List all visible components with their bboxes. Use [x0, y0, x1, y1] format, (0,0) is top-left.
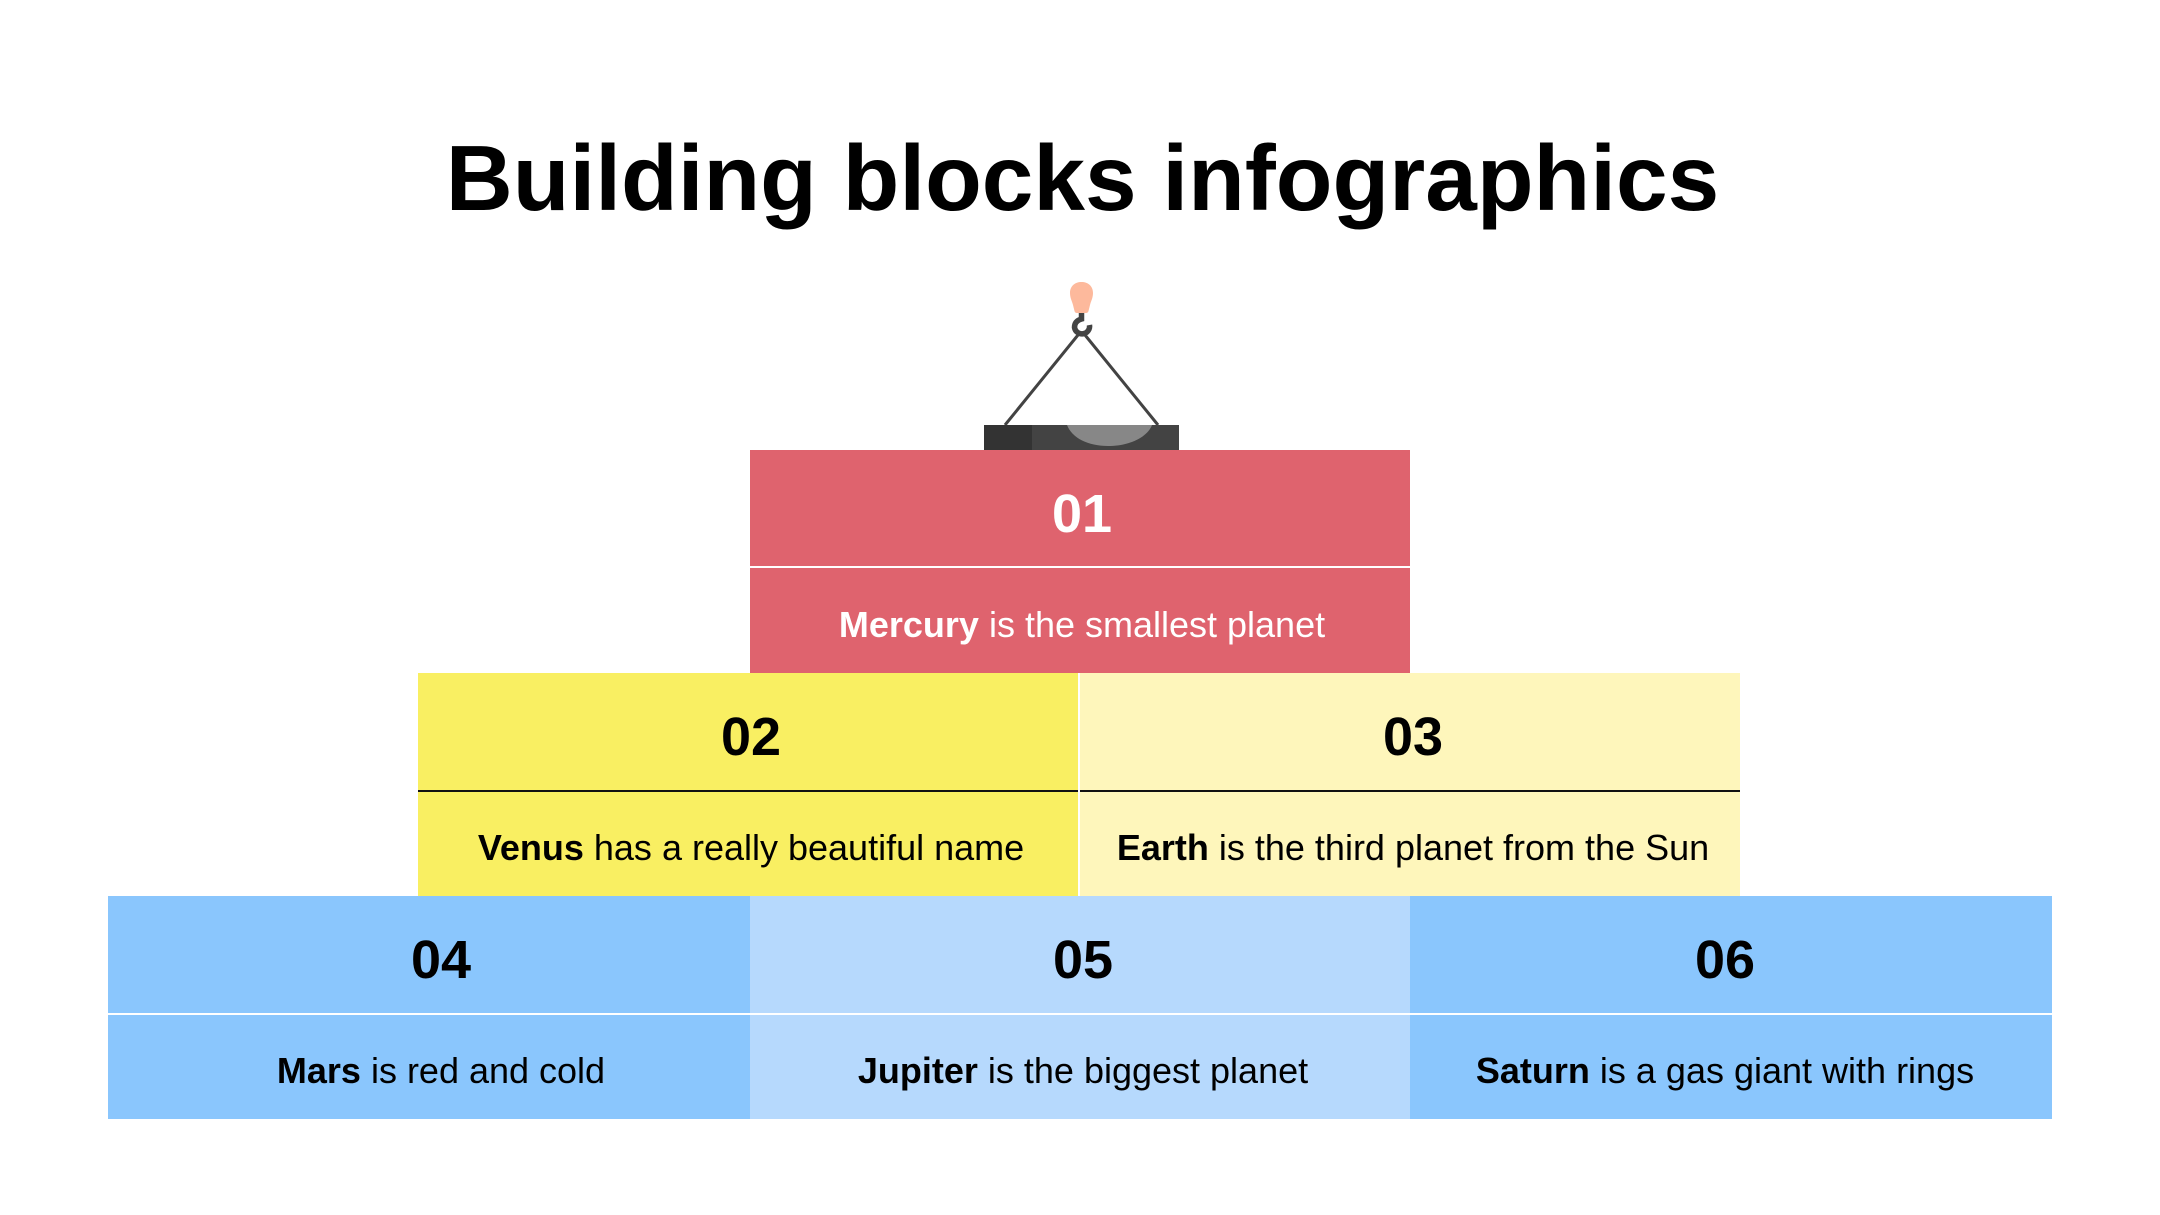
block 02: Venus	[418, 673, 1078, 896]
block 06: Saturn	[1410, 896, 2052, 1119]
block 04: Mars	[108, 896, 750, 1119]
text: Saturn: Saturn is a gas giant with rings	[1476, 1050, 1974, 1091]
number 04: 04	[411, 930, 471, 990]
crane hook weight	[1070, 282, 1093, 313]
hook	[1074, 313, 1090, 334]
text: Mars: Mars is red and cold	[277, 1050, 605, 1091]
text: Earth: Earth is the third planet from the Sun	[1117, 827, 1709, 868]
block 03: Earth	[1080, 673, 1740, 896]
sling ropes	[1005, 335, 1158, 425]
block 05: Jupiter	[750, 896, 1410, 1119]
number 03: 03	[1383, 707, 1443, 767]
number 05: 05	[1053, 930, 1113, 990]
icon: crane hook carrying a block	[984, 282, 1179, 450]
block 01: Mercury	[750, 450, 1410, 673]
number 06: 06	[1695, 930, 1755, 990]
number 01: 01	[1052, 484, 1112, 544]
number 02: 02	[721, 707, 781, 767]
text: Jupiter: Jupiter is the biggest planet	[858, 1050, 1308, 1091]
text: Mercury: Mercury is the smallest planet	[839, 604, 1325, 645]
text: Venus: Venus has a really beautiful name	[478, 827, 1024, 868]
title: Building blocks infographics	[446, 126, 1719, 230]
suspended bar	[984, 425, 1179, 450]
